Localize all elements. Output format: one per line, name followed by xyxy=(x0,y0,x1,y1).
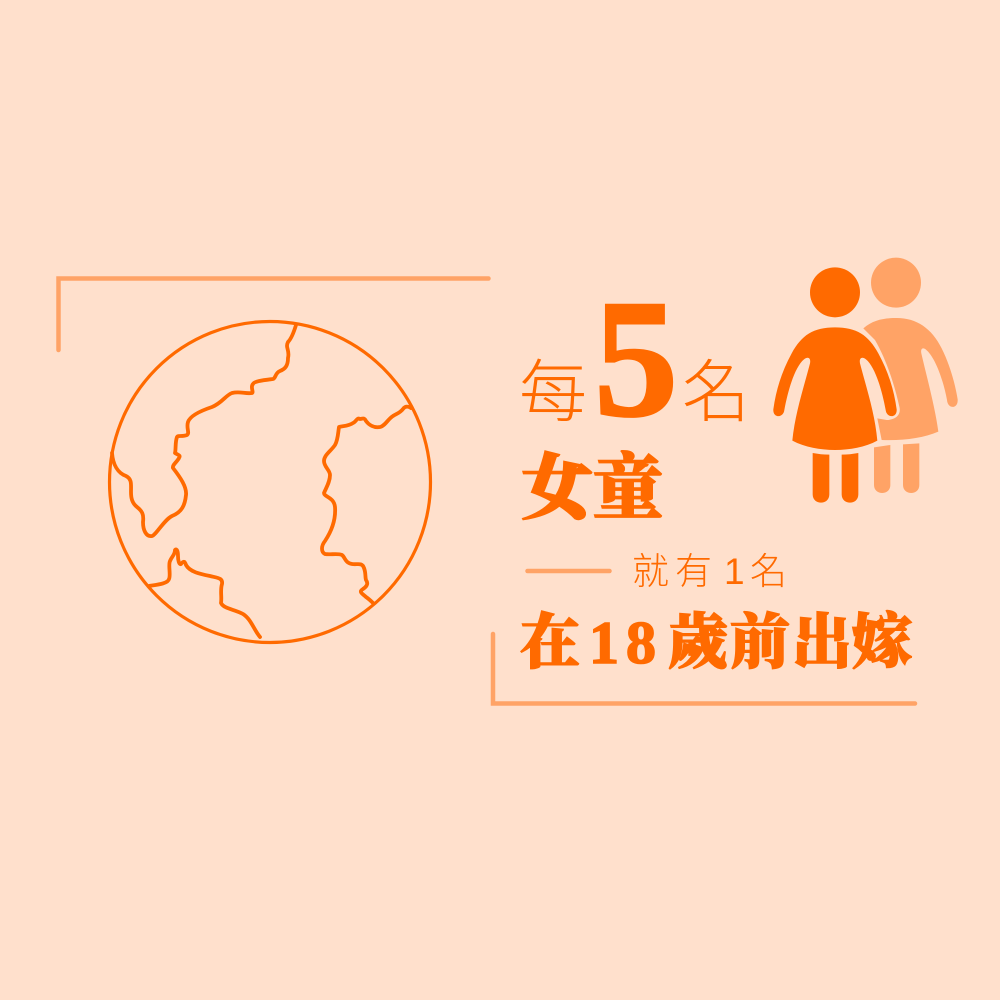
icon: two girls xyxy=(773,258,958,503)
number 5: 5 xyxy=(594,266,678,452)
text: girls: 女童 xyxy=(520,449,664,529)
dash xyxy=(528,569,610,573)
icon: globe xyxy=(110,322,430,642)
bottom-right bracket xyxy=(493,634,915,704)
back figure xyxy=(863,258,958,493)
front figure xyxy=(773,267,897,503)
top-left bracket xyxy=(58,278,488,350)
text: name counter: 名 xyxy=(682,355,750,431)
text: every: 每 xyxy=(519,355,587,431)
text: there is one: 就有1名 xyxy=(632,551,787,592)
text: married before 18: 在18歲前出嫁 xyxy=(520,610,912,676)
